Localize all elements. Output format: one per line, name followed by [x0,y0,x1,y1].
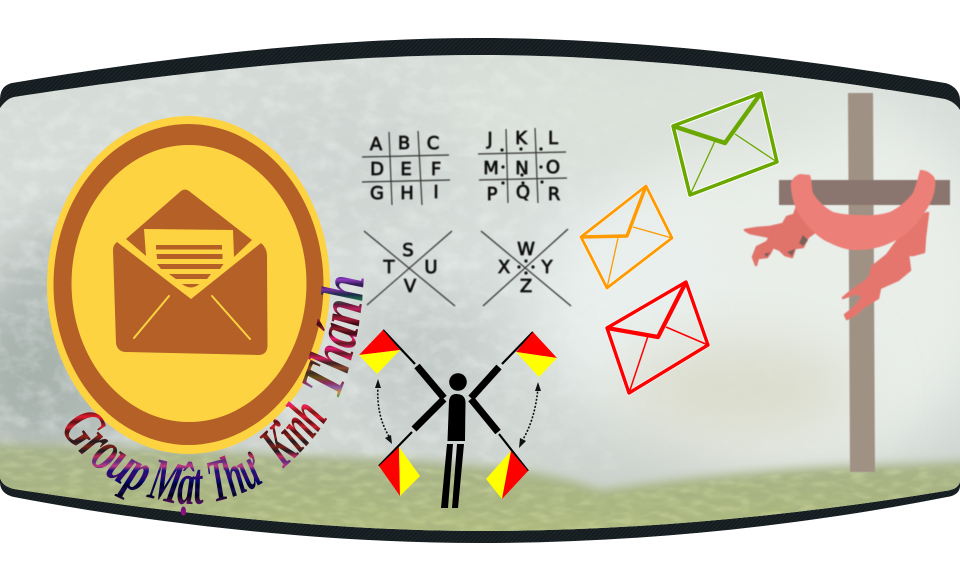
cipher grid J to R with dots: O [546,157,560,178]
cipher grid J to R with dots: K [515,128,528,149]
semaphore signaller figure [359,330,557,508]
cipher cross S to V: T [382,257,396,278]
cipher grid J to R with dots: Q [516,182,530,203]
flag upper right [516,332,557,377]
cipher grid A to I [362,131,450,205]
red drape swag [791,170,935,250]
cipher grid A to I: D [370,159,384,180]
cipher grid A to I: A [370,134,383,155]
cipher cross W to Z with dots: X [498,257,510,278]
icon: red envelope [607,282,708,393]
cipher grid J to R with dots: L [548,128,558,149]
cipher grid J to R with dots: N [515,158,529,179]
flag upper left [359,330,400,374]
cipher grid A to I: I [433,182,439,203]
cipher cross W to Z with dots: Y [540,257,554,278]
cipher grid J to R with dots: R [548,184,560,205]
figure arms [379,330,533,471]
letter lines [156,245,224,288]
envelope flap [126,190,252,257]
icon: orange envelope [581,186,672,288]
grassy hill [0,438,960,531]
curved title text: Group Mật Thư Kinh Thánh [64,277,364,516]
cipher cross S to V: S [402,240,414,261]
cross upright [848,93,875,472]
right ribbon [843,213,928,319]
cipher grid J to R with dots [478,128,567,205]
cipher grid A to I: C [427,133,439,154]
cipher grid A to I: F [431,159,441,180]
cipher cross W to Z with dots: W [517,239,535,260]
logo: circular mail badge [47,116,330,454]
badge inner disc [72,145,306,422]
cipher grid J to R with dots: J [486,129,493,150]
cross with red drape [745,93,950,472]
envelope creases [134,296,250,339]
badge brown ring [54,124,324,445]
cross beam [779,180,950,205]
arrow: left flag motion [375,379,392,444]
cipher grid J to R with dots: M [483,158,499,179]
cipher grid A to I: E [400,159,412,180]
arrow: right flag motion [519,382,541,448]
figure legs [441,444,464,508]
ribbon fold shadows [764,235,808,257]
badge outer ring [47,116,330,454]
cipher cross W to Z with dots: Z [520,276,532,297]
cipher cross S to V: U [424,257,438,278]
pigpen cipher charts [362,128,571,306]
cipher cross W to Z with dots [481,229,571,306]
cipher grid J to R with dots: P [487,184,498,205]
cipher grid A to I: B [398,133,410,154]
left ribbon [745,207,815,265]
envelope body [113,242,268,355]
icon: green envelope [673,93,777,195]
figure torso [448,394,466,441]
cipher cross S to V: V [404,276,417,297]
cipher grid A to I: G [370,183,384,204]
flag lower left [379,447,420,496]
cipher grid A to I: H [400,183,414,204]
flag lower right [486,451,528,499]
figure head [449,373,467,391]
cipher cross S to V [364,231,455,306]
